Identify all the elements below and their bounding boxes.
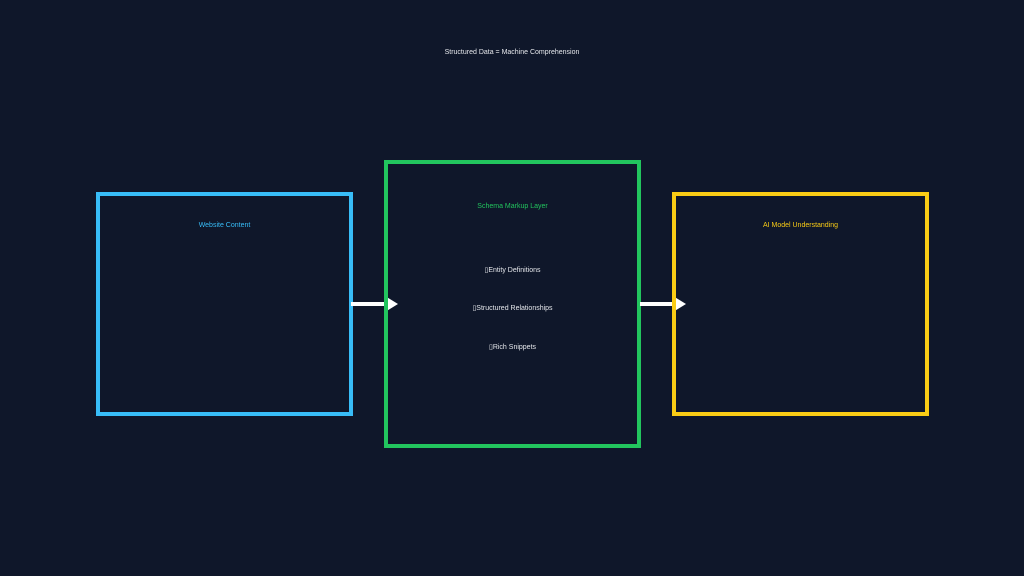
- item: structured relationships: ▯Structured Relationships: [472, 305, 553, 312]
- heading: website content: Website Content: [199, 222, 250, 229]
- title: Structured Data = Machine Comprehension: [445, 49, 579, 56]
- arrow: content to schema: [351, 298, 398, 310]
- heading: AI model understanding: AI Model Understanding: [763, 222, 838, 229]
- arrow: schema to AI: [640, 298, 686, 310]
- panel: schema markup layer: [384, 160, 641, 448]
- panel: AI model understanding: [672, 192, 929, 416]
- item: rich snippets: ▯Rich Snippets: [489, 344, 536, 351]
- heading: schema markup layer: Schema Markup Layer: [477, 203, 548, 210]
- panel: website content: [96, 192, 353, 416]
- item: entity definitions: ▯Entity Definitions: [484, 267, 540, 274]
